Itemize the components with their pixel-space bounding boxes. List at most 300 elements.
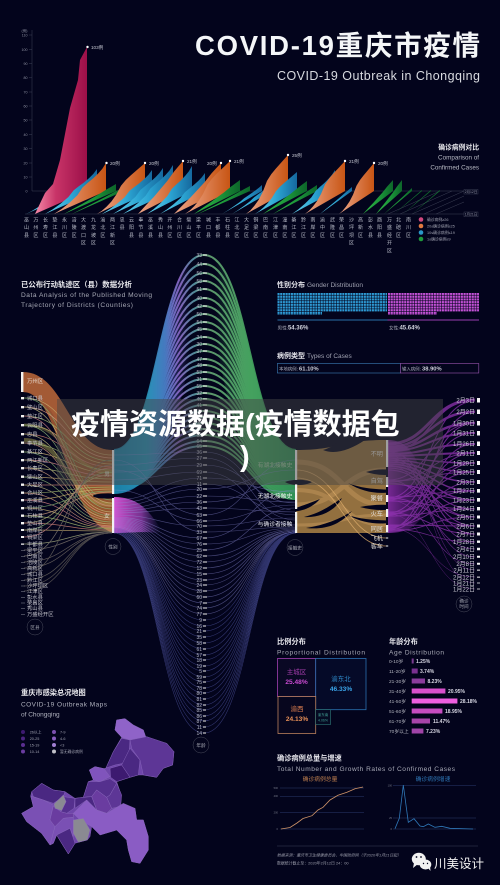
age column numbers: 19 xyxy=(196,664,202,670)
age bars: 18.95% xyxy=(445,709,463,715)
panel: gender distribution: 女性:45.64% xyxy=(389,324,420,332)
district labels: 垫江县 xyxy=(51,216,57,240)
age column numbers: 34 xyxy=(196,335,202,341)
age column numbers: 27 xyxy=(196,456,202,462)
age column numbers: 11 xyxy=(197,725,202,731)
age bars xyxy=(389,658,478,735)
district column labels: 江津区 xyxy=(27,588,44,595)
age column numbers: 20 xyxy=(196,487,202,493)
age column numbers: 55 xyxy=(196,384,202,390)
age column numbers: 35 xyxy=(196,635,202,641)
age column numbers: 36 xyxy=(196,450,202,456)
panel: proportional distribution xyxy=(277,637,366,734)
y axis: 70 xyxy=(24,90,28,94)
age column numbers: 14 xyxy=(196,731,202,737)
age column numbers: 50 xyxy=(196,312,202,318)
age column numbers: 32 xyxy=(196,391,202,397)
age bars: 28.18% xyxy=(460,699,478,705)
age column numbers: 30 xyxy=(196,342,202,348)
age bars: 61-70岁 xyxy=(389,718,406,725)
date column labels: 2月6日 xyxy=(456,524,475,530)
age column numbers: 69 xyxy=(196,470,202,476)
panel: types of cases xyxy=(277,351,479,373)
panel: age distribution: Age Distribution xyxy=(389,650,444,656)
area chart: comparison of confirmed cases xyxy=(22,28,478,256)
date column labels xyxy=(453,398,480,594)
age column numbers: 58 xyxy=(196,641,202,647)
panel: gender distribution: 性别分布 Gender Distribution xyxy=(277,280,363,289)
brand name: 川美设计 xyxy=(434,856,484,871)
age bars: 0-10岁 xyxy=(389,658,404,665)
peak labels: 25例 xyxy=(292,152,302,159)
district column labels xyxy=(21,378,54,618)
age column numbers: 46 xyxy=(196,415,202,421)
panel: gender distribution: 男性:54.36% xyxy=(278,324,309,332)
map of Chongqing xyxy=(22,719,174,863)
chart heading: comparison of cases xyxy=(430,142,479,172)
district column labels: 垫山县 xyxy=(27,519,43,527)
peak labels: 21例 xyxy=(187,158,197,165)
gender node labels: 女 xyxy=(104,512,110,520)
district labels: 秀山县 xyxy=(157,216,163,240)
fill bands of the central arch xyxy=(114,255,296,535)
district labels: 奉节县 xyxy=(137,216,143,240)
district labels: 永川区 xyxy=(61,216,67,240)
age column numbers: 28 xyxy=(196,589,202,595)
age column numbers: 82 xyxy=(196,703,202,709)
district labels: 荣昌区 xyxy=(338,216,344,240)
map heading: COVID-19 Outbreak Maps xyxy=(21,702,108,708)
date column labels: 2月3日 xyxy=(456,398,475,404)
age column numbers: 38 xyxy=(196,421,202,427)
title: COVID-19重庆市疫情 xyxy=(195,30,480,61)
age column numbers: 53 xyxy=(196,370,202,376)
district column labels: 綦江区 xyxy=(27,448,44,456)
district labels: 涪陵区 xyxy=(71,216,77,240)
date column labels: 1月27日 xyxy=(453,488,475,495)
axis circle: confirmation date xyxy=(456,596,472,612)
contact history labels: 有湖北接触史 xyxy=(258,461,293,469)
age column numbers: 70 xyxy=(196,524,202,530)
age column numbers: 56 xyxy=(196,271,202,277)
date column labels: 1月29日 xyxy=(453,460,475,468)
map legend: 7-9 xyxy=(60,730,66,734)
district labels: 大足区 xyxy=(243,216,249,240)
age column numbers: 54 xyxy=(196,320,202,326)
transport node labels: 客车 xyxy=(371,542,383,550)
age column numbers: 63 xyxy=(196,513,202,519)
district column labels: 彭水县 xyxy=(27,593,43,601)
sankey diagram xyxy=(21,253,480,753)
transport node labels: 火车 xyxy=(371,510,383,518)
y axis: 110 xyxy=(22,34,28,38)
age column numbers: 66 xyxy=(196,519,202,525)
age column numbers: 51 xyxy=(196,287,202,293)
date column labels: 1月26日 xyxy=(453,441,475,448)
panel: types of cases: 病例类型 Types of Cases xyxy=(277,351,353,360)
age column numbers: 86 xyxy=(196,714,202,720)
age column numbers: 36 xyxy=(196,500,202,506)
age column numbers: 5 xyxy=(199,669,202,675)
district column labels: 巴南区 xyxy=(27,552,44,560)
age column numbers: 39 xyxy=(196,409,202,415)
age column numbers: 16 xyxy=(196,624,202,630)
district labels: 渝中区 xyxy=(319,216,325,240)
age column numbers: 25 xyxy=(196,548,202,554)
peak labels: 20例 xyxy=(110,160,120,167)
axis circle: gender: 性别 xyxy=(108,544,118,550)
treemap: 渝西 xyxy=(290,704,304,713)
line chart: growth xyxy=(388,784,476,831)
age bars: 7.23% xyxy=(426,729,441,735)
district labels: 沙坪坝区 xyxy=(348,217,354,248)
transport node labels: 自驾 xyxy=(371,477,383,485)
age column numbers: 68 xyxy=(196,433,202,439)
gender node labels: 男 xyxy=(104,471,110,478)
line chart: growth: 100 xyxy=(388,784,393,788)
line chart: total: 400 xyxy=(274,794,279,798)
y axis: 60 xyxy=(24,104,28,108)
district column labels: 两江新区 xyxy=(27,456,49,464)
age column numbers: 61 xyxy=(196,647,202,653)
age bars: 70岁以上 xyxy=(389,728,409,735)
age column numbers: 81 xyxy=(196,697,202,703)
district labels: 合川区 xyxy=(176,216,182,240)
transport node labels: 聚餐 xyxy=(371,494,383,502)
district labels: 万盛经开区 xyxy=(386,217,392,256)
legend: case ranges: 20≤确诊病例≤25 xyxy=(427,224,455,228)
district labels: 北碚区 xyxy=(395,216,401,240)
age column numbers: 59 xyxy=(196,675,202,681)
line chart: total: 0 xyxy=(277,827,279,831)
panel: total number and growth rates: 确诊病例总量与增速 xyxy=(277,754,342,762)
date tags: 2月12日 xyxy=(465,190,477,194)
district labels: 綦江区 xyxy=(290,216,296,240)
flows: districts to gender xyxy=(23,372,123,591)
axis circle: districts xyxy=(27,619,43,635)
age column numbers: 22 xyxy=(196,494,202,500)
legend: case ranges: 确诊病例≥26 xyxy=(427,217,448,222)
age column numbers: 33 xyxy=(196,253,202,259)
map legend: 20-25 xyxy=(30,737,39,741)
date column labels: 1月25日 xyxy=(453,470,475,476)
age column numbers: 77 xyxy=(196,612,202,618)
district column labels: 璧山区 xyxy=(27,472,44,480)
district labels: 黔江区 xyxy=(300,216,306,240)
panel: types of cases: 输入病例: 38.90% xyxy=(402,366,442,372)
age column numbers: 11 xyxy=(197,482,202,488)
y axis xyxy=(22,28,32,194)
district labels: 巴南区 xyxy=(262,217,268,240)
map legend xyxy=(21,730,83,754)
district column labels: 万盛经开区 xyxy=(27,610,54,618)
district labels: 两江新区 xyxy=(109,217,115,248)
panel: age distribution: 年龄分布 xyxy=(389,637,418,646)
age column numbers: 67 xyxy=(196,536,202,542)
district column labels: 黔江区 xyxy=(27,576,44,584)
district labels: 丰都县 xyxy=(214,216,220,240)
map legend: 26以上 xyxy=(30,730,42,734)
peak labels: 20例 xyxy=(207,160,217,167)
sankey node bars xyxy=(21,372,388,546)
treemap: 25.48% xyxy=(285,679,308,686)
age column numbers: 75 xyxy=(196,680,202,686)
source notes xyxy=(277,846,478,866)
transport node labels: 飞机 xyxy=(371,534,384,542)
transport node labels: 不明 xyxy=(371,451,383,458)
district column labels: 梁平区 xyxy=(27,546,44,554)
treemap: 渝东南 xyxy=(318,712,329,717)
district labels: 武隆区 xyxy=(329,216,335,240)
district labels: 石柱县 xyxy=(224,217,230,240)
line chart: total: 200 xyxy=(274,810,279,814)
date column labels: 1月23日 xyxy=(453,498,475,504)
age column numbers: 41 xyxy=(196,403,202,409)
map legend: 暂无确诊病例 xyxy=(60,749,83,754)
transport node labels: 同居 xyxy=(371,526,383,533)
district labels: 江北区 xyxy=(233,216,239,240)
district column labels: 大足区 xyxy=(27,480,44,488)
age column numbers: 24 xyxy=(196,583,202,589)
age column numbers: 45 xyxy=(196,327,202,333)
age column numbers: 31 xyxy=(196,377,202,383)
gender node labels xyxy=(104,471,110,520)
district column labels: 南岸区 xyxy=(27,526,44,534)
axis circle: age: 年龄 xyxy=(196,742,206,749)
treemap xyxy=(278,658,366,734)
district labels: 高新区 xyxy=(357,216,363,240)
date column labels: 2月8日 xyxy=(456,561,475,568)
date column labels: 1月31日 xyxy=(453,430,475,438)
map legend: <3 xyxy=(60,744,64,748)
map heading: of Chongqing xyxy=(21,712,60,718)
subtitle: COVID-19 Outbreak in Chongqing xyxy=(277,69,480,83)
district labels: 忠县 xyxy=(119,217,125,232)
date tags: 1月21日 xyxy=(465,213,477,217)
dot matrix: female xyxy=(388,293,479,315)
district labels: 渝北区 xyxy=(99,216,105,240)
district column labels: 合川区 xyxy=(27,488,44,496)
district labels xyxy=(23,216,411,256)
district column labels: 巫溪县 xyxy=(27,496,43,504)
axis circle: gender xyxy=(105,538,121,554)
age column numbers: 12 xyxy=(196,566,202,572)
source notes: 数据统计截止至：2020年2月12日 24：00 xyxy=(277,860,349,866)
district labels: 铜梁区 xyxy=(252,216,258,240)
district column labels: 城口县 xyxy=(27,395,43,402)
age bars: 11-20岁 xyxy=(389,668,406,675)
date column labels: 1月28日 xyxy=(453,539,475,546)
y axis: (例) xyxy=(22,28,28,33)
age column numbers: 57 xyxy=(196,653,202,659)
age column numbers: 72 xyxy=(196,560,202,566)
district column labels: 涪陵区 xyxy=(27,558,44,566)
peak labels: 20例 xyxy=(149,160,159,167)
panel: gender distribution xyxy=(277,280,479,332)
panel: proportional distribution: 比例分布 xyxy=(277,637,306,646)
district column labels: 铜梁区 xyxy=(27,533,44,541)
age bars: 1.25% xyxy=(416,659,431,665)
date column labels: 2月12日 xyxy=(453,574,475,582)
line chart: growth: 0 xyxy=(391,827,393,831)
district labels: 梁平区 xyxy=(195,216,201,240)
flows: contact history to transport xyxy=(285,440,398,546)
district labels: 开州区 xyxy=(166,217,172,240)
age column numbers: 9 xyxy=(199,618,202,624)
age column numbers: 60 xyxy=(196,595,202,601)
y axis: 10 xyxy=(24,176,28,180)
date column labels: 2月4日 xyxy=(456,546,475,554)
age column numbers: 47 xyxy=(196,357,202,363)
age column numbers: 49 xyxy=(196,397,202,403)
district labels: 南岸区 xyxy=(309,216,315,240)
chart heading: comparison of cases: Comparison of xyxy=(438,154,479,162)
district labels: 万州区 xyxy=(32,217,38,240)
age column numbers: 29 xyxy=(196,463,202,469)
axis circle: districts: 区县 xyxy=(30,625,40,631)
age column numbers: 64 xyxy=(196,439,202,445)
map heading: 重庆市感染总况地图 xyxy=(21,688,86,697)
source notes: 数据来源：重庆市卫生健康委员会、中国政府网（于2020年1月21日起） xyxy=(277,852,401,858)
y axis: 90 xyxy=(24,62,28,66)
legend: case ranges: 1≤确诊病例≤9 xyxy=(427,236,451,242)
age bars: 11.47% xyxy=(433,719,450,725)
age column numbers: 18 xyxy=(196,658,202,664)
district column labels: 万州区 xyxy=(27,378,44,385)
peak labels: 21例 xyxy=(234,158,244,165)
age column numbers: 43 xyxy=(196,506,202,512)
panel: total number and growth rates xyxy=(274,754,476,831)
peak labels: 20例 xyxy=(378,160,388,167)
overlay banner xyxy=(57,399,443,485)
section heading: moving trajectory xyxy=(21,280,152,309)
panel: total number and growth rates: 确诊病例增速 xyxy=(416,775,451,783)
date column labels: 1月21日 xyxy=(453,580,475,588)
age column numbers xyxy=(196,253,207,737)
chart heading: comparison of cases: Confirmed Cases xyxy=(430,164,479,172)
age bars: 51-60岁 xyxy=(389,708,406,715)
district column labels: 高新区 xyxy=(27,564,44,572)
treemap: 24.13% xyxy=(286,716,308,723)
flows: transport to date xyxy=(388,400,475,589)
age column numbers: 21 xyxy=(196,629,202,635)
age bars: 31-40岁 xyxy=(389,688,406,695)
district column labels: 云阳县 xyxy=(27,421,43,429)
y axis: 100 xyxy=(22,48,28,52)
age column numbers: 15 xyxy=(196,572,202,578)
age bars: 21-30岁 xyxy=(389,678,406,685)
middle crossing curves xyxy=(114,452,296,614)
district labels: 巫溪县 xyxy=(147,217,153,240)
district labels: 城口县 xyxy=(205,216,211,240)
area series xyxy=(26,47,440,214)
y axis: 40 xyxy=(24,133,28,137)
axis circle: contact history: 接触史 xyxy=(288,544,302,552)
upper arches xyxy=(114,255,296,499)
panel: age distribution xyxy=(389,637,478,735)
district column labels: 铜川区 xyxy=(27,504,44,512)
date column labels: 2月5日 xyxy=(456,514,475,522)
district labels: 璧山区 xyxy=(185,216,191,240)
y axis: 20 xyxy=(24,162,28,166)
legend: case ranges xyxy=(419,217,455,242)
district labels: 巫山县 xyxy=(23,217,29,240)
section heading: moving trajectory: Data Analysis of the Published Moving xyxy=(21,292,152,299)
age column numbers: 76 xyxy=(196,542,202,548)
y axis: 0 xyxy=(26,190,28,194)
date column labels: 2月3日 xyxy=(456,480,475,486)
contact history labels: 与确诊者接触 xyxy=(258,520,293,528)
district labels: 江津区 xyxy=(272,216,278,240)
age column numbers: 37 xyxy=(196,349,202,355)
district labels: 云阳县 xyxy=(128,217,134,240)
date column labels: 1月24日 xyxy=(453,506,475,513)
age column numbers: 85 xyxy=(196,708,202,714)
axis circle: contact history xyxy=(287,540,303,556)
age bars: 20.95% xyxy=(448,689,466,695)
date column labels: 1月30日 xyxy=(453,420,475,428)
axis circle: confirmation date: 确诊 xyxy=(459,598,469,604)
age column numbers: 44 xyxy=(196,262,202,268)
age column numbers: 62 xyxy=(196,554,202,560)
age column numbers: 33 xyxy=(196,530,202,536)
section heading: moving trajectory: Trajectory of Districts (Counties) xyxy=(21,302,133,309)
age column numbers: 52 xyxy=(196,427,202,433)
district column labels: 石柱县 xyxy=(27,512,43,520)
panel: total number and growth rates: Total Number and Growth Rates of Confirmed Cases xyxy=(277,766,456,773)
age column numbers: 80 xyxy=(196,691,202,697)
y axis: 80 xyxy=(24,76,28,80)
date column labels: 2月10日 xyxy=(453,554,475,561)
age column numbers: 7 xyxy=(199,601,202,607)
axis circle: age xyxy=(193,737,209,753)
age column numbers: 65 xyxy=(196,444,202,450)
date column labels: 2月1日 xyxy=(456,450,475,458)
age column numbers: 78 xyxy=(196,686,202,692)
age bars: 41-50岁 xyxy=(389,698,406,705)
district column labels: 忠县 xyxy=(27,431,38,438)
date column labels: 2月2日 xyxy=(456,409,475,416)
date column labels: 1月22日 xyxy=(453,586,475,594)
chart heading: comparison of cases: 确诊病例对比 xyxy=(438,142,479,152)
district labels: 潼南区 xyxy=(281,216,287,240)
dot matrix: male xyxy=(278,293,387,315)
district labels: 长寿区 xyxy=(42,216,48,240)
date column labels: 2月7日 xyxy=(456,532,475,538)
district labels: 九龙坡区 xyxy=(90,216,96,248)
map legend: 4-6 xyxy=(60,737,66,741)
treemap: 4.06% xyxy=(318,718,328,722)
district column labels: 秀山县 xyxy=(27,604,43,612)
contact history labels xyxy=(258,461,293,528)
district labels: 酉阳县 xyxy=(376,217,382,240)
district labels: 南川区 xyxy=(405,216,411,240)
peak labels xyxy=(86,44,388,167)
overlay title xyxy=(71,408,400,473)
district labels: 彭水县 xyxy=(367,216,373,240)
y axis: 30 xyxy=(24,147,28,151)
date tags xyxy=(464,190,478,217)
panel: total number and growth rates: 确诊病例总量 xyxy=(303,775,338,783)
age bars: 3.74% xyxy=(420,669,435,675)
district column labels: 奉节县 xyxy=(27,439,43,447)
line chart: total xyxy=(274,786,364,831)
district column labels: 长寿区 xyxy=(27,464,44,472)
map legend: 15-19 xyxy=(30,744,39,748)
age column numbers: 40 xyxy=(196,296,202,302)
age column numbers: 48 xyxy=(196,363,202,369)
age column numbers: 74 xyxy=(196,606,202,612)
